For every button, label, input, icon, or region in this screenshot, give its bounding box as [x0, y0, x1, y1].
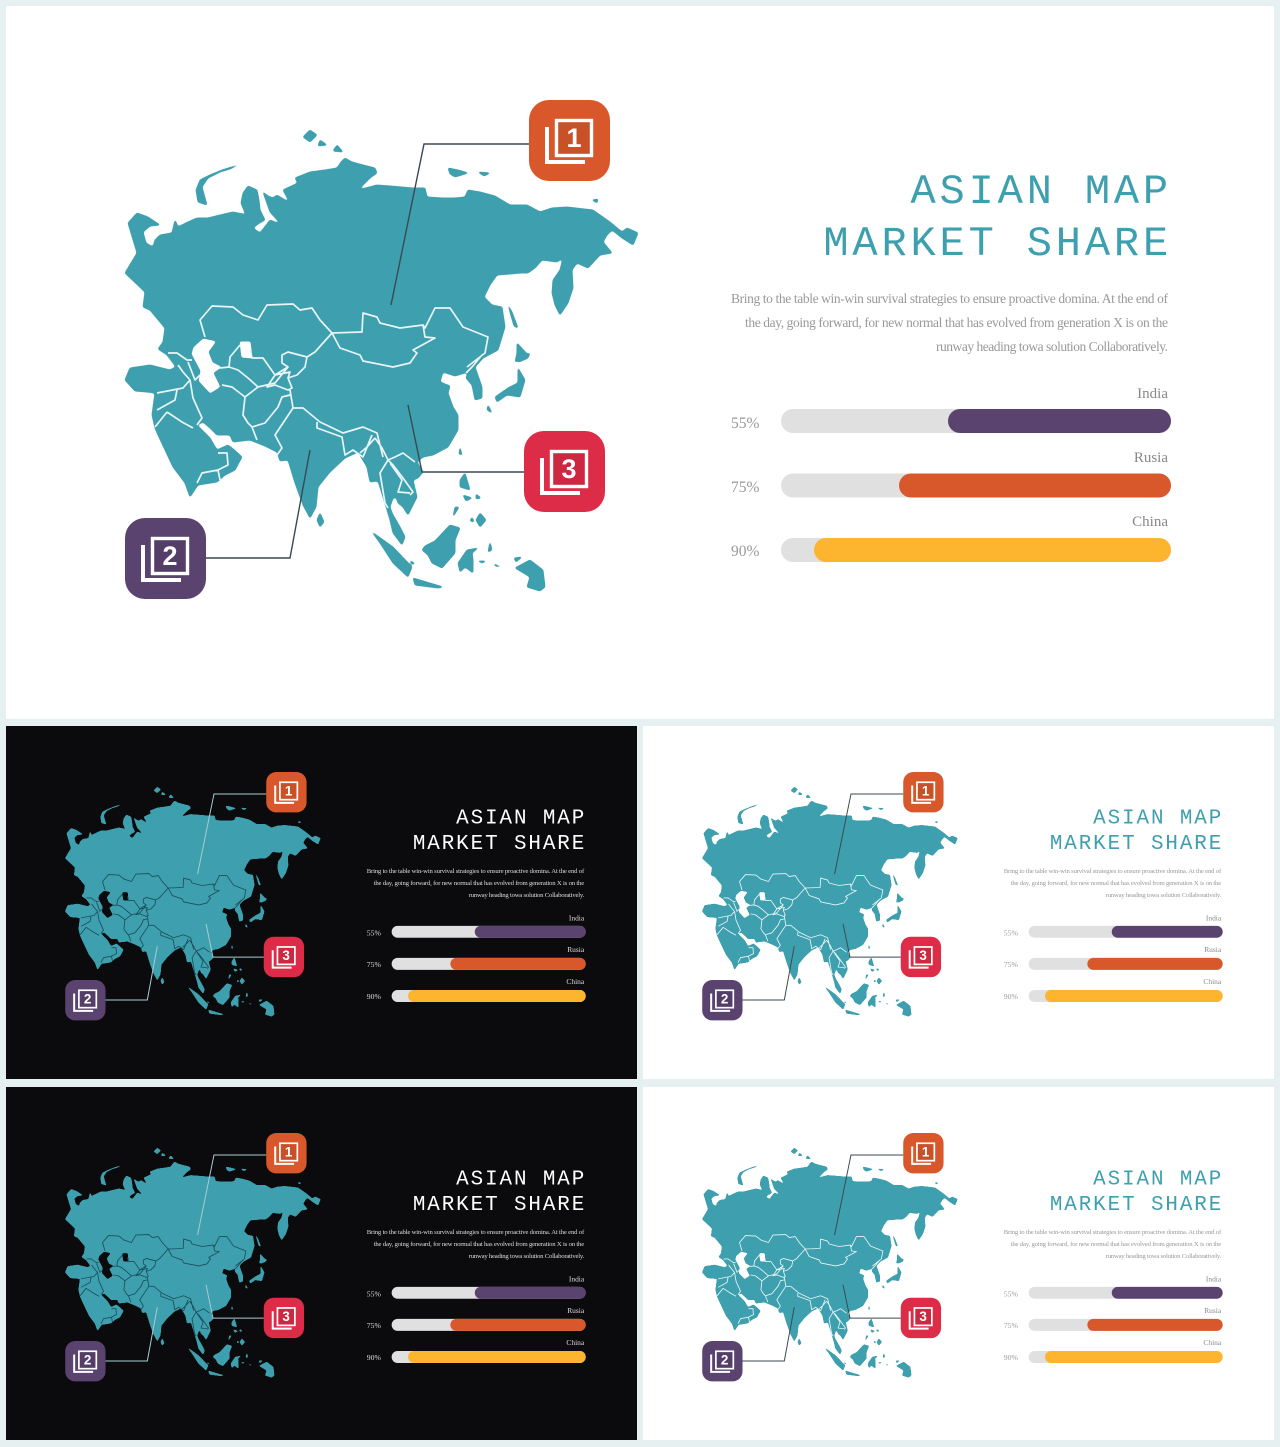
bar: India 55% — [367, 1274, 586, 1299]
bar: China 90% — [367, 977, 586, 1002]
map of Asia — [702, 787, 957, 1016]
bar: Rusia 75% — [367, 1306, 586, 1331]
bar: China 90%: 90% — [367, 992, 381, 1001]
bar: China 90% — [1004, 1338, 1223, 1363]
panel: main light slide — [6, 6, 1274, 719]
title: ASIAN MAP — [456, 1168, 586, 1191]
title: ASIAN MAP — [910, 168, 1172, 216]
bar: China 90% — [1004, 977, 1223, 1002]
icon 3: 3 — [919, 1309, 927, 1324]
bar: India 55% — [1004, 913, 1223, 938]
dark slide content — [65, 772, 586, 1020]
leader lines — [106, 1155, 266, 1361]
body text — [731, 291, 1168, 354]
map of Asia — [65, 1148, 320, 1377]
main slide background — [6, 6, 1274, 719]
bar: China 90%: China — [1132, 514, 1168, 530]
light slide content — [702, 772, 1223, 1020]
icon 1 — [903, 772, 944, 812]
dark slide background — [6, 1087, 637, 1440]
title: ASIAN MAP — [456, 807, 586, 830]
bar: Rusia 75%: Rusia — [1204, 945, 1222, 954]
panel: dark slide, row 2 left — [6, 726, 637, 1079]
bar: China 90% — [731, 514, 1171, 562]
panel: light slide, row 2 right — [643, 726, 1274, 1079]
bar: China 90%: China — [566, 977, 585, 986]
body text: Bring to the table win-win survival strategies to ensure proactive domina. At the end of — [731, 291, 1168, 306]
title: MARKET SHARE — [1050, 1194, 1223, 1217]
icon 2: 2 — [84, 1352, 91, 1367]
bar: China 90%: 90% — [1004, 1353, 1018, 1362]
bar: China 90%: 90% — [731, 543, 760, 560]
icon 3 — [264, 937, 304, 977]
icon 2: 2 — [162, 541, 178, 571]
leader lines — [743, 1155, 903, 1361]
title: ASIAN MAP — [1093, 807, 1223, 830]
bar: Rusia 75% — [1004, 1306, 1223, 1331]
icon 3 — [901, 937, 941, 977]
title — [413, 807, 586, 856]
body text: the day, going forward, for new normal that has evolved from generation X is on the — [374, 1241, 584, 1248]
icon 1: 1 — [922, 783, 930, 798]
icon 3 — [264, 1298, 304, 1338]
bar: India 55%: India — [569, 1274, 585, 1283]
bar: Rusia 75%: Rusia — [1204, 1306, 1222, 1315]
bar: Rusia 75%: 75% — [367, 1321, 381, 1330]
bar: India 55%: India — [1206, 1274, 1222, 1283]
bar: China 90%: 90% — [1004, 992, 1018, 1001]
icon 2: 2 — [721, 991, 728, 1006]
body text: Bring to the table win-win survival strategies to ensure proactive domina. At the end of — [367, 1229, 585, 1236]
panel: light slide, row 3 right — [643, 1087, 1274, 1440]
title: MARKET SHARE — [1050, 833, 1223, 856]
icon 3: 3 — [561, 454, 577, 484]
icon 1: 1 — [285, 783, 293, 798]
title: MARKET SHARE — [413, 1194, 586, 1217]
body text: runway heading towa solution Collaboratively. — [936, 339, 1168, 354]
bar: Rusia 75%: 75% — [1004, 1321, 1018, 1330]
title: MARKET SHARE — [413, 833, 586, 856]
icon 1 — [266, 1133, 307, 1173]
bar: Rusia 75% — [367, 945, 586, 970]
body text: Bring to the table win-win survival strategies to ensure proactive domina. At the end of — [1004, 868, 1222, 875]
body text — [367, 868, 585, 899]
body text — [1004, 1229, 1222, 1260]
bar: India 55% — [731, 386, 1171, 433]
title — [413, 1168, 586, 1217]
icon 2 — [65, 980, 106, 1020]
body text: the day, going forward, for new normal that has evolved from generation X is on the — [374, 880, 584, 887]
title — [1050, 1168, 1223, 1217]
leader line 1 — [391, 144, 529, 305]
body text: the day, going forward, for new normal that has evolved from generation X is on the — [1011, 1241, 1221, 1248]
icon 2: 2 — [84, 991, 91, 1006]
map of Asia — [65, 787, 320, 1016]
bar: India 55%: 55% — [1004, 928, 1018, 937]
map of Asia — [125, 130, 638, 591]
icon 2 — [702, 980, 743, 1020]
icon 3 — [524, 431, 605, 512]
leader line 2 — [206, 450, 310, 558]
body text: the day, going forward, for new normal that has evolved from generation X is on the — [745, 315, 1168, 330]
body text: Bring to the table win-win survival strategies to ensure proactive domina. At the end of — [367, 868, 585, 875]
icon 2: 2 — [721, 1352, 728, 1367]
dark slide content — [65, 1133, 586, 1381]
icon 1: 1 — [285, 1144, 293, 1159]
title — [1050, 807, 1223, 856]
title: ASIAN MAP — [1093, 1168, 1223, 1191]
body text: runway heading towa solution Collaboratively. — [1106, 892, 1222, 899]
bar: India 55%: 55% — [367, 928, 381, 937]
bar: China 90% — [367, 1338, 586, 1363]
leader line 3 — [408, 405, 524, 472]
bar: Rusia 75% — [1004, 945, 1223, 970]
leader lines — [106, 794, 266, 1000]
icon 1: 1 — [566, 123, 582, 153]
icon 1 — [266, 772, 307, 812]
bar: China 90%: China — [566, 1338, 585, 1347]
bar: India 55%: 55% — [367, 1289, 381, 1298]
dark slide background — [6, 726, 637, 1079]
bar: China 90%: China — [1203, 1338, 1222, 1347]
bar: Rusia 75%: 75% — [367, 960, 381, 969]
bar: India 55% — [1004, 1274, 1223, 1299]
icon 3: 3 — [919, 948, 927, 963]
bar: India 55%: 55% — [1004, 1289, 1018, 1298]
title — [823, 168, 1172, 268]
icon 1 — [529, 100, 610, 181]
map of Asia — [702, 1148, 957, 1377]
bar: India 55%: India — [1137, 386, 1168, 402]
bar: Rusia 75%: Rusia — [567, 945, 585, 954]
bar: India 55%: India — [569, 913, 585, 922]
title: MARKET SHARE — [823, 220, 1172, 268]
bar: China 90%: China — [1203, 977, 1222, 986]
bar: Rusia 75%: 75% — [1004, 960, 1018, 969]
icon 2 — [702, 1341, 743, 1381]
bar: Rusia 75%: Rusia — [1134, 450, 1168, 466]
body text: Bring to the table win-win survival strategies to ensure proactive domina. At the end of — [1004, 1229, 1222, 1236]
bar: India 55%: 55% — [731, 415, 760, 432]
icon 1 — [903, 1133, 944, 1173]
light slide background — [643, 1087, 1274, 1440]
icon 2 — [125, 518, 206, 599]
body text: runway heading towa solution Collaboratively. — [469, 892, 585, 899]
body text — [1004, 868, 1222, 899]
light slide background — [643, 726, 1274, 1079]
bar: China 90%: 90% — [367, 1353, 381, 1362]
icon 2 — [65, 1341, 106, 1381]
icon 3: 3 — [282, 948, 290, 963]
bar: Rusia 75%: 75% — [731, 479, 760, 496]
body text: runway heading towa solution Collaboratively. — [469, 1253, 585, 1260]
light slide content — [702, 1133, 1223, 1381]
icon 3: 3 — [282, 1309, 290, 1324]
body text: the day, going forward, for new normal that has evolved from generation X is on the — [1011, 880, 1221, 887]
icon 1: 1 — [922, 1144, 930, 1159]
body text — [367, 1229, 585, 1260]
icon 3 — [901, 1298, 941, 1338]
bar: Rusia 75%: Rusia — [567, 1306, 585, 1315]
body text: runway heading towa solution Collaboratively. — [1106, 1253, 1222, 1260]
bar: India 55%: India — [1206, 913, 1222, 922]
leader lines — [743, 794, 903, 1000]
bar: India 55% — [367, 913, 586, 938]
panel: dark slide, row 3 left — [6, 1087, 637, 1440]
bar: Rusia 75% — [731, 450, 1171, 498]
